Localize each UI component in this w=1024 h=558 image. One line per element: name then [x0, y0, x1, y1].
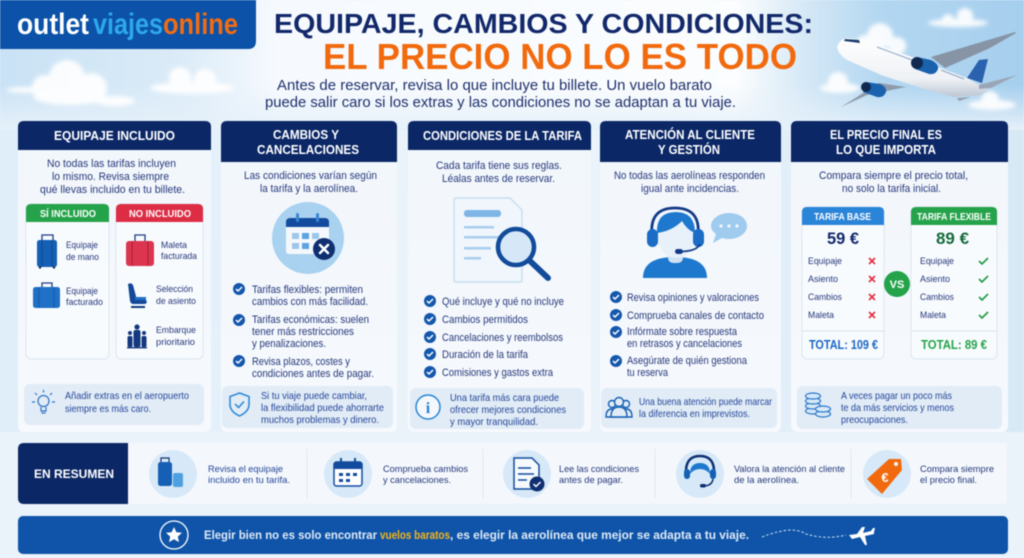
card: tarifa base: TARIFA BASE — [814, 211, 871, 223]
logo: viajes — [93, 8, 163, 41]
icon: carry-on suitcase — [37, 235, 57, 269]
summary item: equipaje: Revisa el equipaje — [208, 464, 283, 475]
intro text — [614, 170, 765, 195]
intro text: la tarifa y la aerolínea. — [260, 183, 358, 195]
card: sí incluido: SÍ INCLUIDO — [40, 207, 96, 220]
clouds — [6, 8, 1016, 110]
card: no incluido: prioritario — [156, 337, 195, 348]
card: no incluido: de asiento — [156, 296, 196, 307]
heading: Y GESTIÓN — [658, 142, 720, 157]
check list: Duración de la tarifa — [442, 349, 529, 361]
intro text: Compara siempre el precio total, — [819, 170, 968, 182]
summary item: equipaje: incluido en tu tarifa. — [208, 475, 290, 486]
check list — [424, 295, 564, 379]
intro text — [244, 170, 377, 195]
intro text: lo mismo. Revisa siempre — [52, 171, 169, 183]
icon: info: i — [426, 400, 431, 417]
intro text: qué llevas incluido en tu billete. — [40, 184, 185, 196]
summary item: atención: Valora la atención al cliente — [734, 464, 845, 475]
panel: el precio final — [791, 121, 1008, 432]
intro text — [40, 158, 185, 196]
check list: tener más restricciones — [252, 326, 354, 338]
check list: Revisa plazos, costes y — [252, 356, 350, 368]
summary label — [18, 443, 128, 504]
card: tarifa flexible: TOTAL: 89 € — [921, 338, 987, 352]
summary item: atención: de la aerolínea. — [734, 475, 799, 486]
icon: seat — [128, 283, 147, 308]
intro text: igual ante incidencias. — [641, 183, 739, 195]
icon: star — [160, 521, 188, 549]
callout: flexibilidad: la flexibilidad puede ahorrarte — [261, 402, 384, 414]
panel: atención al cliente — [600, 121, 781, 432]
closing banner — [18, 516, 1008, 554]
card: tarifa flexible: Cambios — [920, 292, 954, 303]
intro text — [819, 170, 968, 195]
check list: Comprueba canales de contacto — [627, 310, 764, 322]
callout: tarifa más cara: Una tarifa más cara puede — [450, 392, 559, 404]
icon: info — [416, 395, 440, 419]
check list: Tarifas económicas: suelen — [252, 314, 369, 326]
panel: cambios y cancelaciones — [221, 121, 397, 432]
card: sí incluido: Equipaje — [66, 240, 98, 251]
callout: buena atención: Una buena atención puede marcar — [639, 396, 772, 408]
heading: LO QUE IMPORTA — [836, 142, 937, 157]
callout: pagar un poco más: te da más servicios y menos — [841, 402, 954, 414]
heading: ATENCIÓN AL CLIENTE — [625, 127, 755, 142]
callout: flexibilidad — [222, 386, 393, 428]
icon: document with magnifier — [454, 198, 548, 282]
card: tarifa flexible — [911, 207, 997, 359]
card: tarifa base: Asiento — [808, 274, 838, 285]
card: tarifa flexible: 89 € — [936, 229, 970, 248]
subtitle — [265, 78, 736, 111]
card: sí incluido: de mano — [66, 252, 99, 263]
check list: y penalizaciones. — [252, 338, 326, 350]
check list: Infórmate sobre respuesta — [627, 326, 738, 338]
heading: CONDICIONES DE LA TARIFA — [423, 128, 583, 143]
icon: people boarding — [127, 324, 147, 348]
callout: pagar un poco más: preocupaciones. — [841, 414, 908, 426]
card: tarifa flexible: Maleta — [920, 310, 947, 321]
callout: flexibilidad: muchos problemas y dinero. — [261, 414, 379, 426]
card: no incluido — [116, 204, 203, 359]
heading — [18, 121, 211, 150]
callout: extras: siempre es más caro. — [65, 403, 151, 415]
icon: shield — [230, 393, 249, 416]
check list: Cambios permitidos — [442, 314, 528, 326]
subtitle: Antes de reservar, revisa lo que incluye tu billete. Un vuelo barato — [277, 78, 712, 94]
card: tarifa flexible: Asiento — [920, 274, 950, 285]
logo: outlet — [17, 8, 89, 41]
heading: CANCELACIONES — [257, 142, 359, 157]
intro text: No todas las tarifas incluyen — [47, 158, 176, 170]
summary item: condiciones: antes de pagar. — [559, 475, 623, 486]
vs badge — [884, 271, 910, 297]
icon: checked suitcase — [33, 283, 60, 308]
heading — [791, 121, 1008, 162]
callout: buena atención — [601, 388, 777, 428]
card: sí incluido: facturado — [66, 297, 103, 308]
icon: red suitcase — [126, 235, 154, 266]
summary strip — [18, 443, 1007, 504]
callout: extras: Añadir extras en el aeropuerto — [65, 390, 189, 402]
callout: extras — [24, 384, 204, 425]
panel: condiciones de la tarifa — [408, 121, 591, 432]
summary item: precio final: € — [881, 470, 889, 485]
summary item: condiciones: Lee las condiciones — [559, 464, 639, 475]
check list: Qué incluye y qué no incluye — [442, 296, 564, 308]
summary item: cambios: Comprueba cambios — [383, 464, 468, 475]
banner text: , es elegir la aerolínea que mejor se adapta a tu viaje. — [450, 528, 749, 542]
summary item: precio final — [863, 450, 994, 498]
title: EQUIPAJE, CAMBIOS Y CONDICIONES: — [274, 8, 813, 39]
subtitle: puede salir caro si los extras y las condiciones no se adaptan a tu viaje. — [265, 95, 736, 111]
card: sí incluido — [26, 204, 109, 359]
check list: tu reserva — [627, 367, 669, 379]
card: no incluido: Maleta — [161, 240, 188, 251]
callout: flexibilidad: Si tu viaje puede cambiar, — [261, 390, 367, 402]
icon: coins — [806, 393, 830, 417]
icon: calendar with cross — [272, 202, 344, 274]
intro text: Cada tarifa tiene sus reglas. — [436, 160, 562, 172]
heading — [221, 121, 397, 162]
icon: dashed flight path and plane — [762, 527, 875, 545]
check list — [233, 283, 374, 380]
card: tarifa base: 59 € — [827, 229, 860, 248]
callout: tarifa más cara: ofrecer mejores condiciones — [450, 404, 566, 416]
heading: EQUIPAJE INCLUIDO — [54, 128, 175, 143]
card: no incluido: Selección — [156, 284, 193, 295]
icon: customer agent — [643, 208, 707, 278]
card: tarifa flexible: Equipaje — [920, 256, 954, 267]
callout: tarifa más cara — [410, 388, 584, 429]
summary item: cambios — [324, 450, 468, 498]
check list — [610, 291, 764, 379]
intro text — [436, 160, 562, 185]
check list: Cancelaciones y reembolsos — [442, 332, 563, 344]
check list: en retrasos y cancelaciones — [627, 338, 742, 350]
banner text: vuelos baratos — [380, 528, 450, 542]
heading — [408, 121, 591, 150]
icon: people group — [606, 398, 632, 417]
icon: speech bubble — [711, 213, 747, 243]
card: no incluido: NO INCLUIDO — [129, 208, 191, 220]
card: tarifa base: Equipaje — [808, 256, 842, 267]
banner text: Elegir bien no es solo encontrar — [204, 528, 377, 542]
check list: condiciones antes de pagar. — [252, 368, 374, 380]
check list: cambios con más facilidad. — [252, 296, 368, 308]
summary item: equipaje — [149, 450, 290, 498]
callout: buena atención: la diferencia en imprevistos. — [639, 408, 750, 420]
card: tarifa base — [802, 207, 884, 359]
summary item: atención — [676, 450, 845, 498]
card: tarifa flexible: TARIFA FLEXIBLE — [917, 211, 991, 223]
card: tarifa base: Maleta — [808, 310, 835, 321]
check list: Asegúrate de quién gestiona — [627, 355, 748, 367]
intro text: No todas las aerolíneas responden — [614, 170, 765, 182]
callout: tarifa más cara: y mayor tranquilidad. — [450, 416, 538, 428]
check list: Tarifas flexibles: permiten — [252, 284, 363, 296]
callout: pagar un poco más: A veces pagar un poco más — [841, 390, 952, 402]
card: no incluido: facturada — [161, 251, 198, 262]
intro text: Léalas antes de reservar. — [442, 173, 555, 185]
check list: Revisa opiniones y valoraciones — [627, 292, 759, 304]
banner text — [204, 528, 749, 542]
card: tarifa base: TOTAL: 109 € — [809, 338, 878, 352]
intro text: no solo la tarifa inicial. — [842, 183, 941, 195]
logo: online — [163, 8, 238, 41]
icon: light bulb — [32, 390, 55, 413]
card: sí incluido: Equipaje — [66, 286, 98, 297]
card: tarifa base: Cambios — [808, 292, 842, 303]
summary item: precio final: el precio final. — [920, 475, 977, 486]
summary label: EN RESUMEN — [34, 467, 114, 481]
vs badge: VS — [890, 279, 904, 291]
heading: EL PRECIO FINAL ES — [830, 127, 942, 142]
title — [274, 8, 813, 77]
panel: equipaje incluido — [18, 121, 211, 432]
check list: Comisiones y gastos extra — [442, 367, 554, 379]
heading: CAMBIOS Y — [273, 127, 339, 142]
icon: airplane — [837, 32, 1017, 107]
summary item: cambios: y cancelaciones. — [383, 475, 451, 486]
logo — [0, 0, 256, 49]
heading — [600, 121, 781, 162]
intro text: Las condiciones varían según — [244, 170, 377, 182]
summary item: condiciones — [503, 450, 639, 498]
card: no incluido: Embarque — [156, 325, 196, 336]
summary item: precio final: Compara siempre — [920, 464, 994, 475]
title: EL PRECIO NO LO ES TODO — [323, 36, 797, 77]
callout: pagar un poco más — [797, 386, 1002, 429]
